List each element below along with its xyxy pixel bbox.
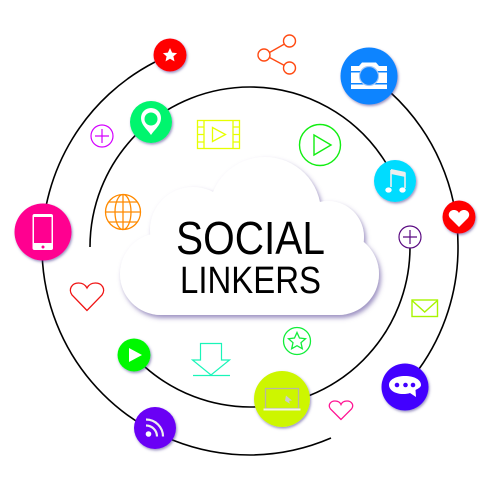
icon: star badge xyxy=(154,38,186,72)
orbit arcs xyxy=(42,62,458,455)
icon: music badge xyxy=(374,160,416,202)
icon: purple plus xyxy=(91,125,113,147)
icon: phone badge xyxy=(14,204,72,260)
icon: mail xyxy=(412,300,438,316)
icon: play badge xyxy=(118,338,150,372)
icon: globe xyxy=(106,194,140,230)
icon: pink heart xyxy=(329,401,353,420)
icon: camera badge xyxy=(340,48,398,104)
icon: share xyxy=(258,35,296,74)
icon: outline play xyxy=(300,124,340,166)
cloud xyxy=(120,157,379,315)
icon: dark plus xyxy=(399,226,421,248)
icon: film xyxy=(198,120,240,148)
icon: red outline heart xyxy=(70,283,104,310)
title: LINKERS xyxy=(180,260,321,302)
title xyxy=(176,212,325,302)
icon: chat badge xyxy=(382,364,428,410)
icon: laptop badge xyxy=(254,371,310,427)
icon: location badge xyxy=(130,101,172,143)
icon: outline star xyxy=(284,328,310,354)
icon: heart badge xyxy=(442,200,476,234)
icon: rss badge xyxy=(134,407,176,449)
icon: download arrow xyxy=(192,344,230,376)
title: SOCIAL xyxy=(176,212,325,264)
